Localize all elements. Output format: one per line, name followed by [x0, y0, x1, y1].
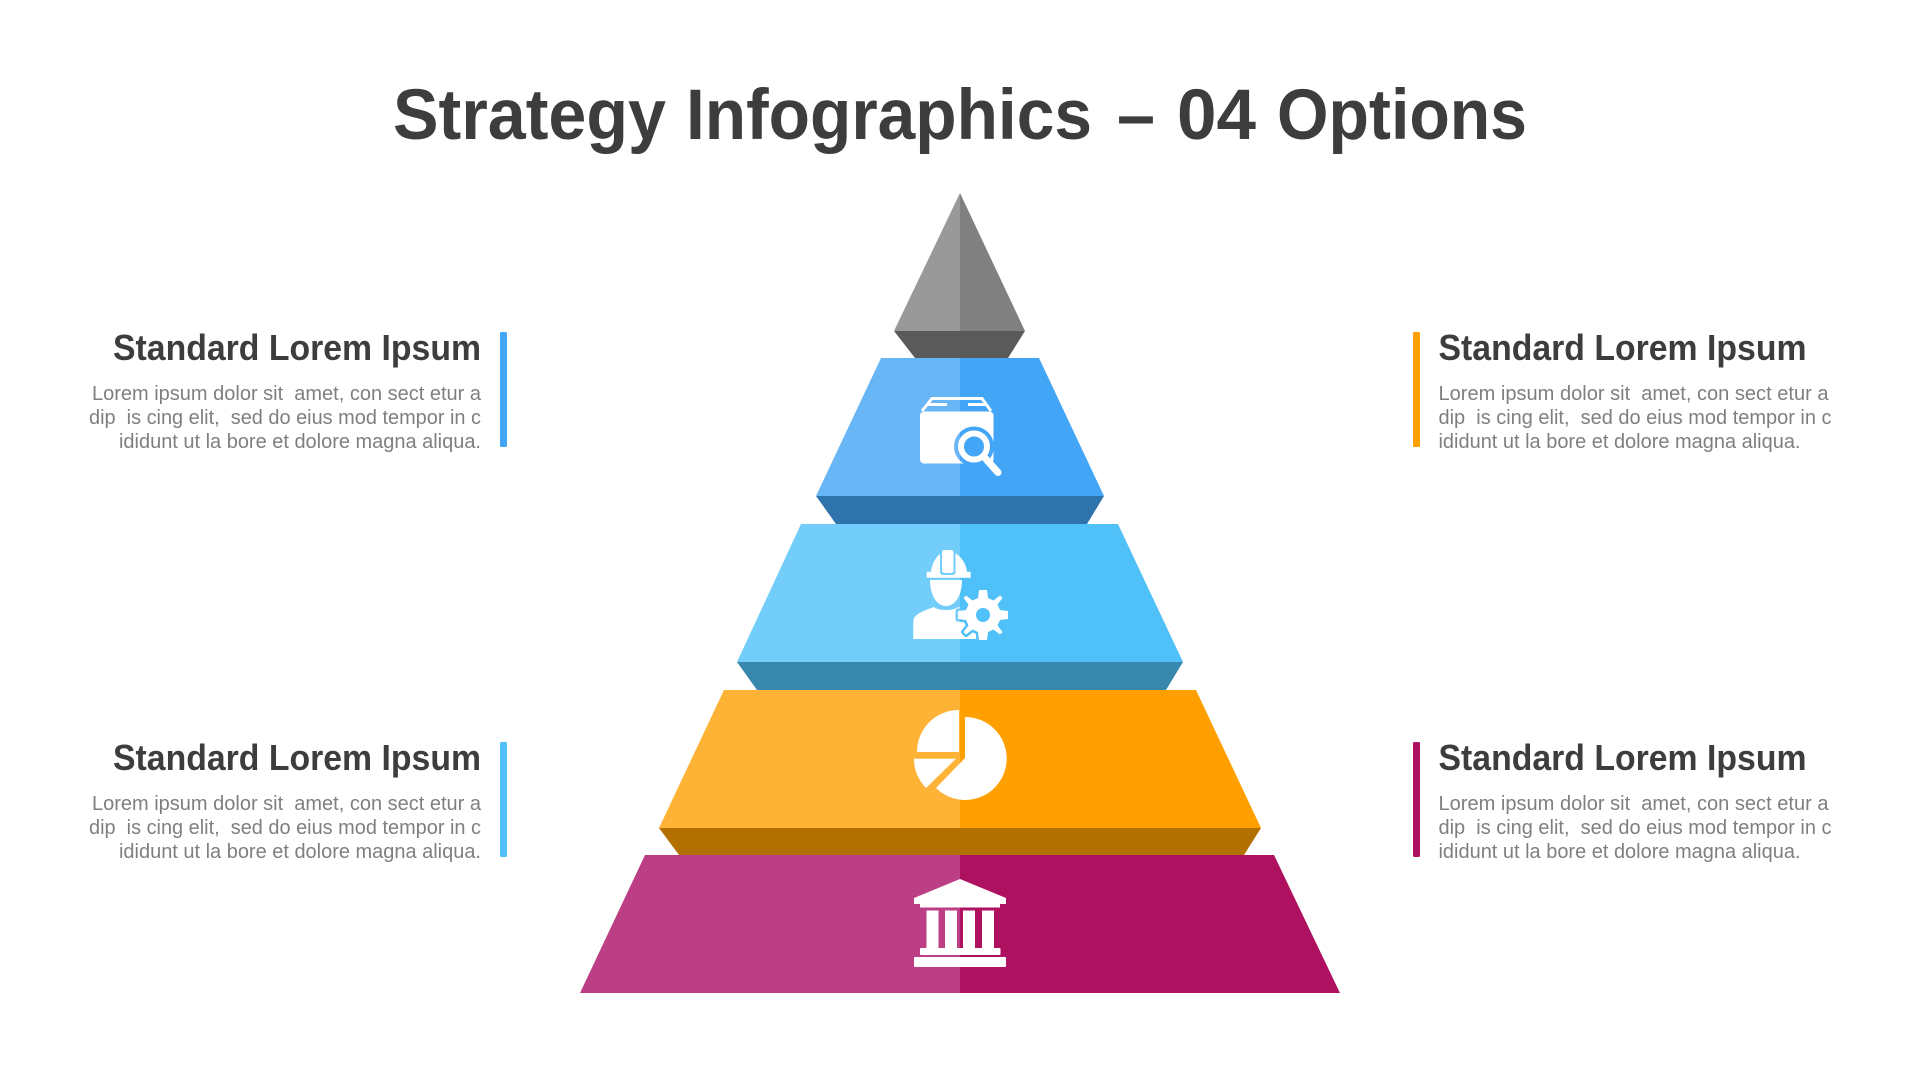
- title: –: [1117, 76, 1155, 155]
- tier: light blue: [737, 524, 1183, 690]
- icon: box with magnifier: [920, 398, 998, 472]
- text block: top left: dip is cing elit, sed do eius mod tempor in c: [89, 407, 481, 429]
- text block: bottom left: ididunt ut la bore et dolore magna aliqua.: [119, 841, 481, 863]
- title: Infographics: [686, 76, 1092, 155]
- icon: pie chart: [914, 710, 1007, 800]
- accent bar: top left: [500, 332, 507, 447]
- text block: top right: ididunt ut la bore et dolore magna aliqua.: [1438, 431, 1800, 453]
- text block: bottom left: Lorem ipsum dolor sit amet, con sect etur a: [92, 793, 482, 815]
- text block: top right: Standard Lorem Ipsum: [1438, 327, 1806, 368]
- text block: bottom right: Lorem ipsum dolor sit amet, con sect etur a: [1438, 793, 1829, 815]
- text block: bottom right: [1438, 737, 1832, 863]
- text block: bottom right: dip is cing elit, sed do eius mod tempor in c: [1438, 817, 1832, 839]
- text block: top left: Lorem ipsum dolor sit amet, con sect etur a: [92, 383, 482, 405]
- text block: bottom right: Standard Lorem Ipsum: [1438, 737, 1806, 778]
- text block: top left: Standard Lorem Ipsum: [113, 327, 481, 368]
- text block: bottom left: [89, 737, 482, 863]
- text block: top right: [1438, 327, 1832, 453]
- text block: top right: dip is cing elit, sed do eius mod tempor in c: [1438, 407, 1832, 429]
- accent bar: bottom right: [1413, 742, 1420, 857]
- text block: top left: ididunt ut la bore et dolore magna aliqua.: [119, 431, 481, 453]
- text block: top left: [89, 327, 482, 453]
- tier: blue: [816, 358, 1104, 524]
- title: [393, 76, 1527, 155]
- title: Options: [1277, 76, 1527, 155]
- accent bar: top right: [1413, 332, 1420, 447]
- text block: bottom left: Standard Lorem Ipsum: [113, 737, 481, 778]
- icon: classical building: [914, 879, 1006, 967]
- text block: top right: Lorem ipsum dolor sit amet, con sect etur a: [1438, 383, 1829, 405]
- title: 04: [1177, 76, 1257, 155]
- tier: magenta: [580, 855, 1340, 993]
- text block: bottom left: dip is cing elit, sed do eius mod tempor in c: [89, 817, 481, 839]
- tier: orange: [659, 690, 1261, 855]
- accent bar: bottom left: [500, 742, 507, 857]
- text block: bottom right: ididunt ut la bore et dolore magna aliqua.: [1438, 841, 1800, 863]
- pyramid: [580, 193, 1340, 993]
- title: Strategy: [393, 76, 666, 155]
- icon: worker with gear: [913, 550, 1008, 640]
- tier: grey apex: [894, 193, 1025, 358]
